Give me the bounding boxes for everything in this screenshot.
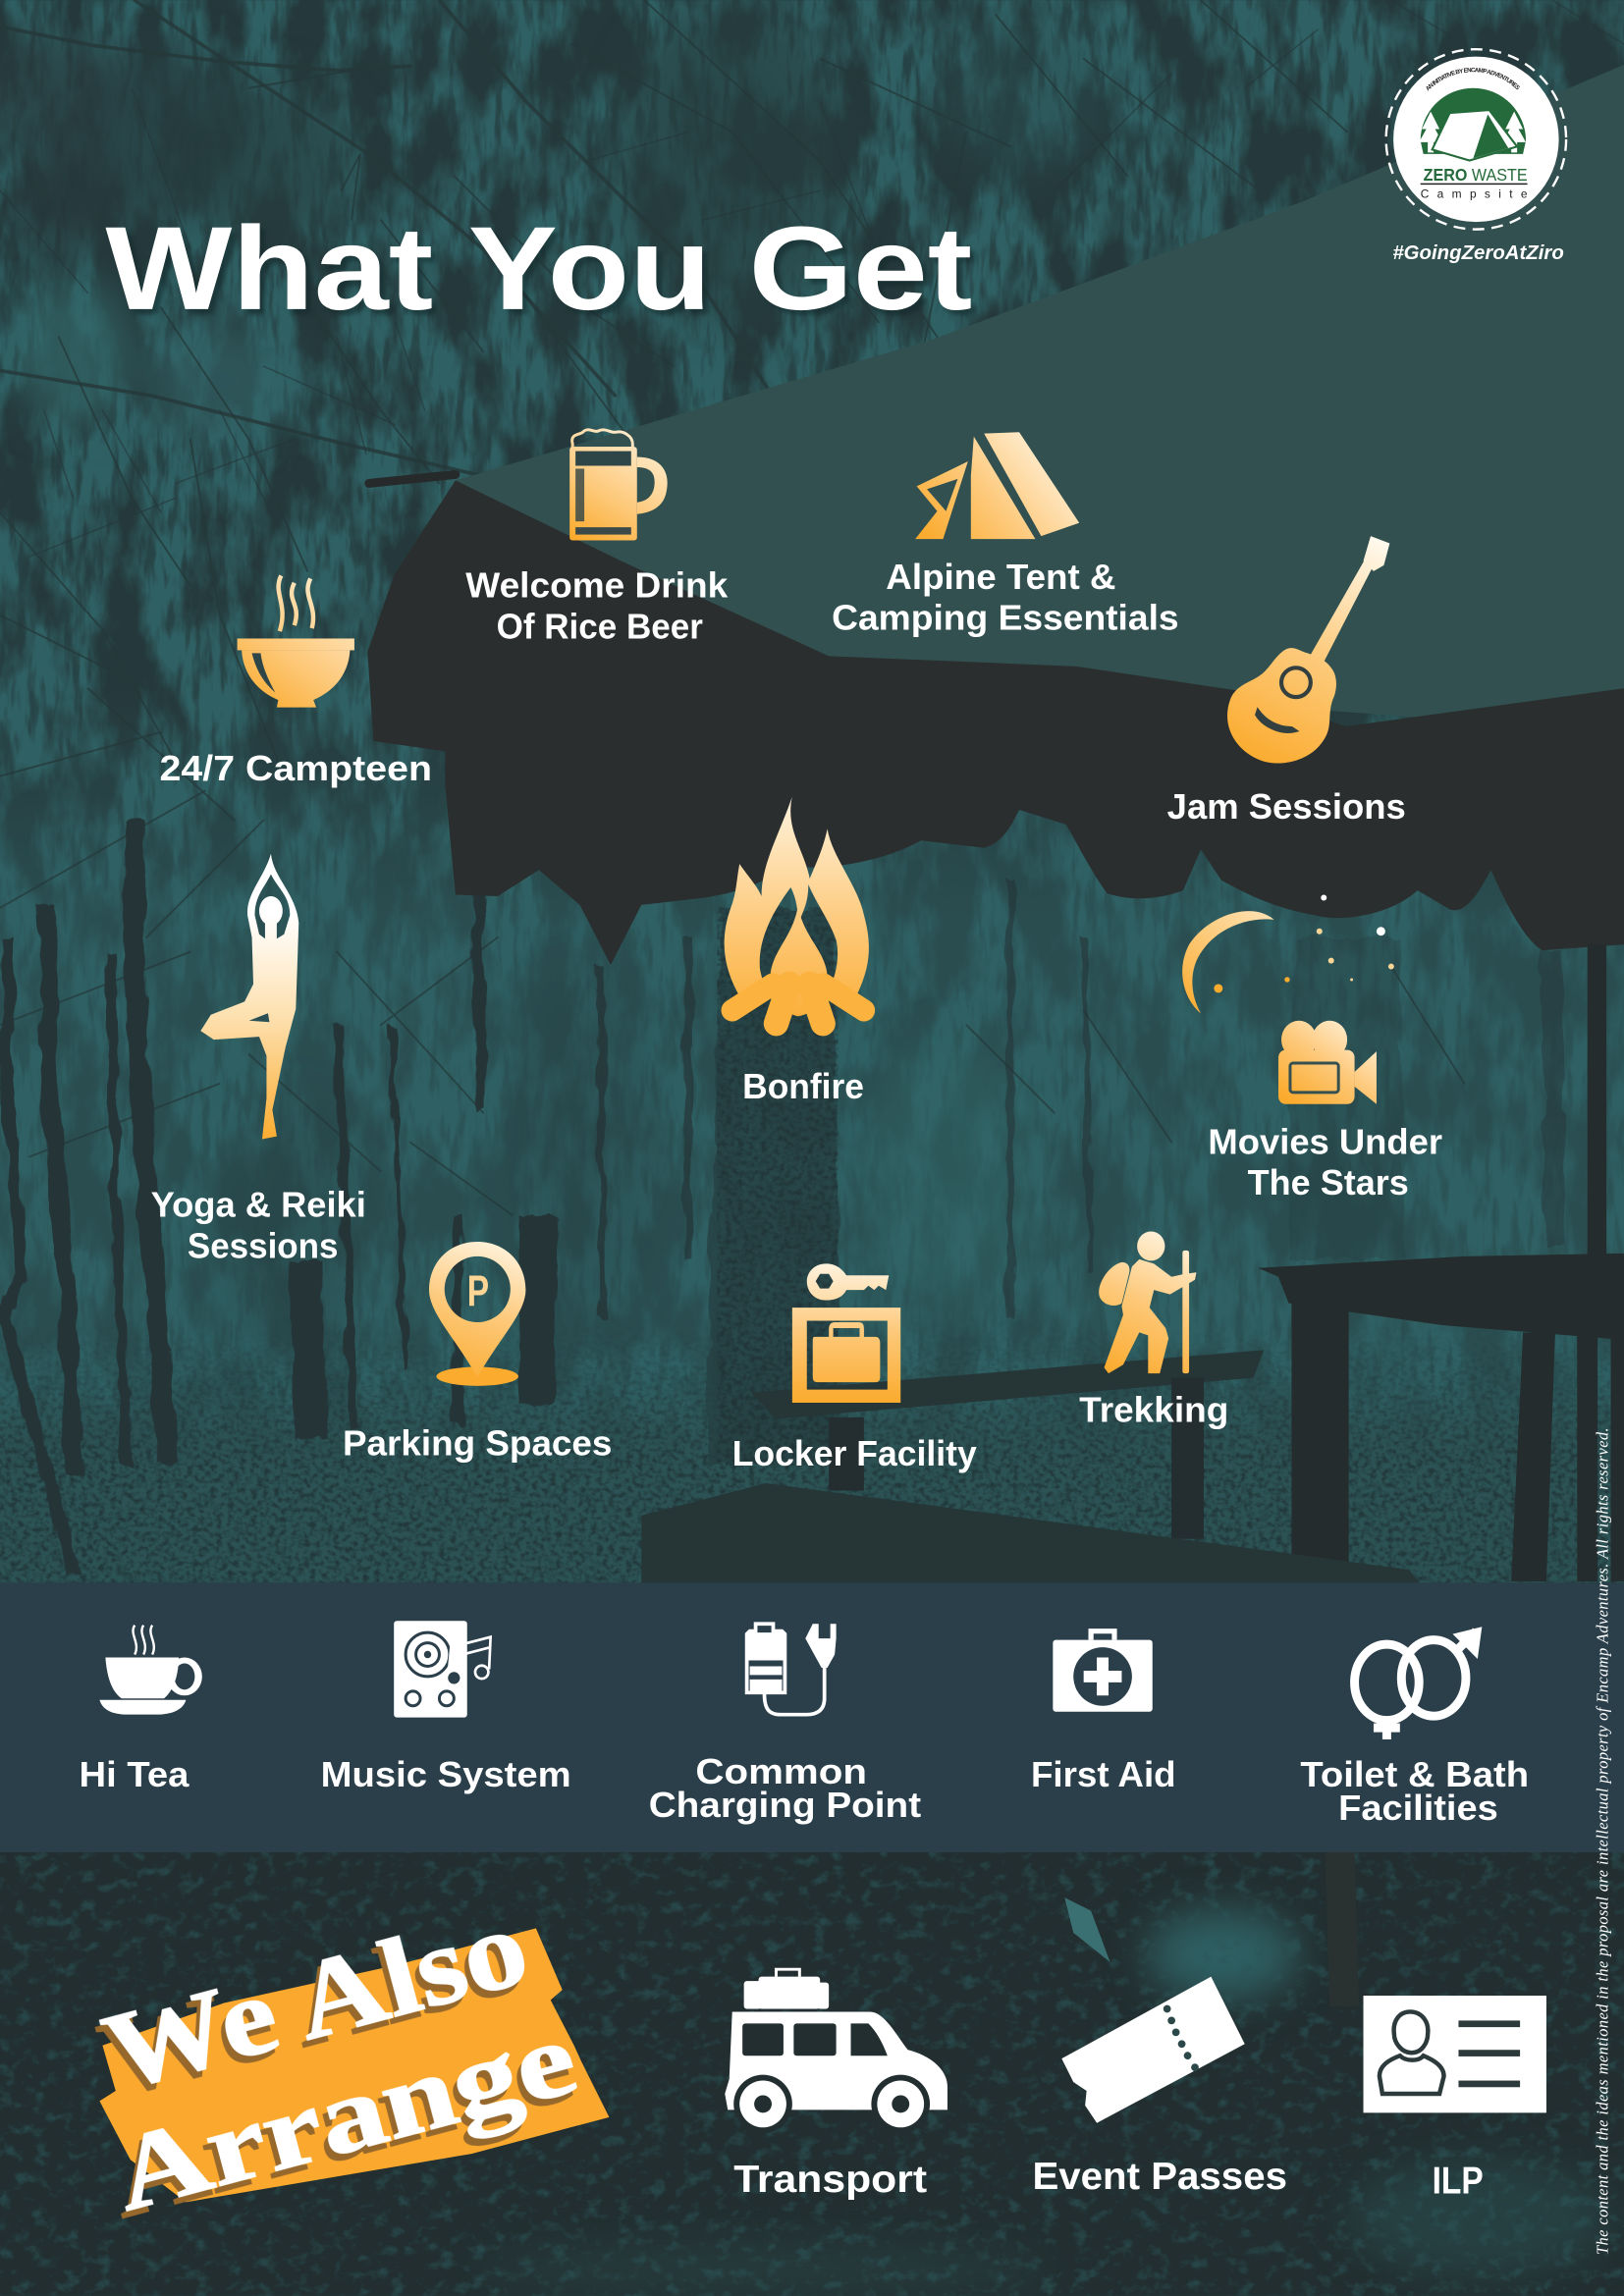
label: Sessions [188, 1226, 339, 1265]
large central trunk [706, 908, 842, 1465]
item: welcome drink [465, 430, 728, 646]
item: jam sessions [1167, 536, 1406, 827]
band item: first aid [1031, 1631, 1176, 1794]
we also text: We Also [92, 1886, 539, 2114]
logo: tent door [1473, 115, 1508, 158]
forest trunks [4, 820, 1555, 1575]
hashtag: #GoingZeroAtZiro [1392, 242, 1564, 264]
item: locker [732, 1263, 977, 1473]
label: Jam Sessions [1167, 787, 1406, 827]
icon: movie camera [1278, 1021, 1377, 1104]
icon: beer mug [569, 430, 668, 541]
icon: tree pose figure [200, 854, 298, 1140]
icon: key and locker with suitcase [792, 1263, 900, 1403]
label: Locker Facility [732, 1434, 977, 1473]
label [1300, 1755, 1529, 1828]
logo: pine trees [1419, 112, 1526, 152]
logo badge [1384, 48, 1567, 231]
ground below the band [0, 1852, 1624, 2296]
logo: tent [1433, 110, 1517, 161]
logo: initiative arc text: AN INITIATIVE BY ENCAMP ADVENTURES [1426, 67, 1520, 91]
icon: tea cup [99, 1626, 202, 1715]
tarp canopy, lit upper surface [456, 65, 1624, 732]
bench [641, 1350, 1421, 1584]
band item: toilet and bath [1300, 1627, 1529, 1828]
label [649, 1752, 921, 1825]
icon: tent [915, 432, 1079, 539]
item: parking [343, 1242, 612, 1464]
label: First Aid [1031, 1755, 1176, 1794]
logo: divider [1421, 184, 1528, 185]
icon: ticket [1061, 1977, 1245, 2123]
bare branches overhead are decorative texture [0, 0, 1624, 1215]
label: Parking Spaces [343, 1424, 612, 1464]
item: yoga [151, 854, 366, 1265]
item: campteen [160, 575, 432, 788]
label: Trekking [1079, 1390, 1228, 1429]
icon: first aid kit [1053, 1631, 1153, 1712]
label: Movies Under [1208, 1122, 1442, 1161]
callout: we also arrange [92, 1886, 609, 2233]
item: transport [725, 1969, 947, 2201]
logo: waste wordmark: WASTE [1472, 165, 1528, 185]
tarp guy rope [369, 474, 456, 483]
band item: common charging point [649, 1624, 921, 1825]
title: What You Get [105, 202, 972, 335]
label: Event Passes [1032, 2156, 1287, 2198]
orange brush stroke [99, 1928, 609, 2202]
label: Hi Tea [80, 1755, 190, 1794]
label: Charging Point [649, 1786, 921, 1825]
label: Facilities [1338, 1789, 1498, 1828]
background photo: forest [0, 0, 1624, 1582]
label [1208, 1122, 1442, 1202]
label: Of Rice Beer [497, 607, 703, 646]
icon: battery and plug [747, 1624, 837, 1715]
arrange text: Arrange [102, 1999, 587, 2233]
label [832, 558, 1179, 638]
icon: bonfire [725, 797, 869, 1024]
label: 24/7 Campteen [160, 749, 432, 788]
label: The Stars [1248, 1163, 1409, 1202]
pale trunk above the table [1288, 937, 1406, 1259]
label: Transport [733, 2159, 927, 2201]
label: Common [695, 1752, 867, 1791]
band item: music system [321, 1621, 571, 1794]
label: ILP [1433, 2160, 1484, 2202]
icon: location pin: P [467, 1267, 489, 1316]
copyright note, vertical: The content and the ideas mentioned in the proposal are intellectual property of Encamp Adventures. All rights reserved. [1594, 1427, 1612, 2255]
icon: hiker with stick [1099, 1232, 1197, 1373]
label [465, 566, 728, 646]
label: Camping Essentials [832, 599, 1179, 638]
label: Toilet & Bath [1300, 1755, 1529, 1794]
icon: van with luggage [725, 1969, 947, 2133]
icon: steaming bowl [238, 575, 354, 708]
logo: zero wordmark: ZERO [1424, 165, 1467, 185]
item: trekking [1079, 1232, 1228, 1429]
logo: campsite word: Campsite [1421, 187, 1528, 201]
icon: crescent moon and stars [1182, 894, 1394, 1013]
item: event passes [1032, 1977, 1287, 2198]
band: amenities [0, 1582, 1624, 1852]
logo: green dome [1421, 88, 1526, 154]
picnic table and pole, right side [1258, 944, 1624, 1581]
item: movies under the stars [1182, 894, 1442, 1202]
band item: hi tea [80, 1626, 202, 1794]
icon: speaker with music note [394, 1621, 491, 1718]
icon: location pin [429, 1242, 525, 1386]
label: Welcome Drink [465, 566, 728, 606]
label [151, 1186, 366, 1265]
tarp canopy, dark underside with scalloped edge [367, 480, 1624, 965]
label: Bonfire [742, 1067, 864, 1106]
icon: gender symbols [1355, 1627, 1482, 1739]
item: alpine tent [832, 432, 1179, 638]
item: ilp [1364, 1996, 1546, 2202]
icon: id card [1364, 1996, 1546, 2112]
label: Yoga & Reiki [151, 1186, 366, 1225]
label: Music System [321, 1755, 571, 1794]
item: bonfire [725, 797, 869, 1106]
label: Alpine Tent & [886, 558, 1115, 597]
icon: guitar [1227, 536, 1389, 764]
